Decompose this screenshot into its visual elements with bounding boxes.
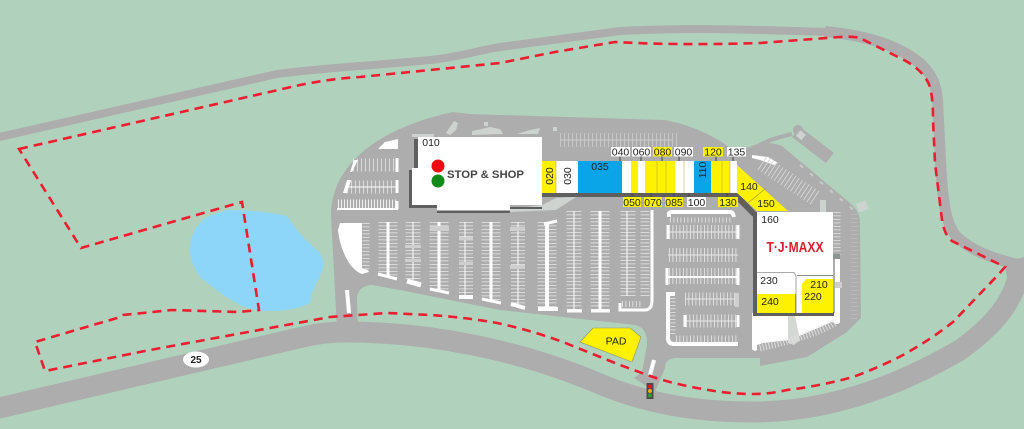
unit label 140: 140 — [740, 181, 758, 193]
pad site: PAD — [606, 336, 627, 348]
unit tags: top row — [611, 146, 746, 158]
unit tags: bottom row: 070 — [644, 197, 662, 209]
unit tags: bottom row: 085 — [665, 197, 683, 209]
pond — [190, 210, 324, 311]
unit label 210: 210 — [810, 279, 828, 291]
parking stalls: central east field — [667, 212, 738, 344]
unit tags: top row: 060 — [633, 146, 650, 158]
route 25 marker: 25 — [190, 355, 202, 366]
light parking islands — [405, 226, 525, 269]
unit tags: top row: 090 — [675, 146, 692, 158]
perimeter road — [0, 29, 1024, 266]
white plaza by T.J.Maxx — [752, 254, 842, 351]
route 25 road — [0, 257, 1024, 412]
unit label 020: 020 — [544, 167, 556, 185]
unit 210 — [802, 279, 833, 288]
icon: traffic light — [646, 383, 654, 399]
unit label 110: 110 — [697, 161, 709, 178]
unit tags: top row: 040 — [612, 146, 629, 158]
unit label 230: 230 — [760, 275, 778, 287]
parking lot pavement — [331, 112, 861, 392]
unit 220 — [802, 288, 833, 313]
unit tags: bottom row: 100 — [688, 197, 705, 209]
building shadows — [409, 139, 834, 316]
parking stalls: north-west field — [337, 139, 680, 209]
unit label 150: 150 — [757, 198, 775, 210]
corner units 140 and 150 — [737, 165, 788, 211]
anchor store: Stop & Shop — [412, 137, 542, 210]
parking stalls: north-east field — [752, 155, 856, 320]
unit tags: top row: 080 — [654, 146, 671, 158]
unit tags: bottom row: 130 — [719, 197, 737, 209]
unit 240 — [757, 294, 795, 313]
light service pads — [412, 121, 868, 212]
unit label 010: 010 — [422, 137, 440, 149]
unit label 035: 035 — [591, 161, 609, 173]
parking stalls: main field — [338, 211, 645, 310]
anchor store: T.J.Maxx — [757, 212, 833, 313]
pad site — [580, 328, 641, 362]
T.J.Maxx logo: T·J·MAXX — [766, 239, 824, 256]
parking spines and curbs — [347, 210, 654, 375]
retail strip units — [542, 161, 737, 193]
route 25 marker — [183, 352, 209, 368]
unit tags: bottom row: 050 — [623, 197, 641, 209]
unit label 240: 240 — [761, 296, 779, 308]
unit tags: top row: 120 — [704, 146, 722, 158]
icon: green availability dot — [432, 174, 444, 188]
unit label 220: 220 — [804, 291, 822, 303]
unit tags: top row: 135 — [728, 146, 745, 158]
unit label 030: 030 — [562, 167, 574, 185]
icon: red availability dot — [432, 160, 444, 172]
unit tags: bottom row — [623, 197, 738, 209]
Stop & Shop name: STOP & SHOP — [447, 169, 524, 181]
unit label 160: 160 — [761, 214, 779, 226]
unit tag ticks — [620, 156, 733, 197]
